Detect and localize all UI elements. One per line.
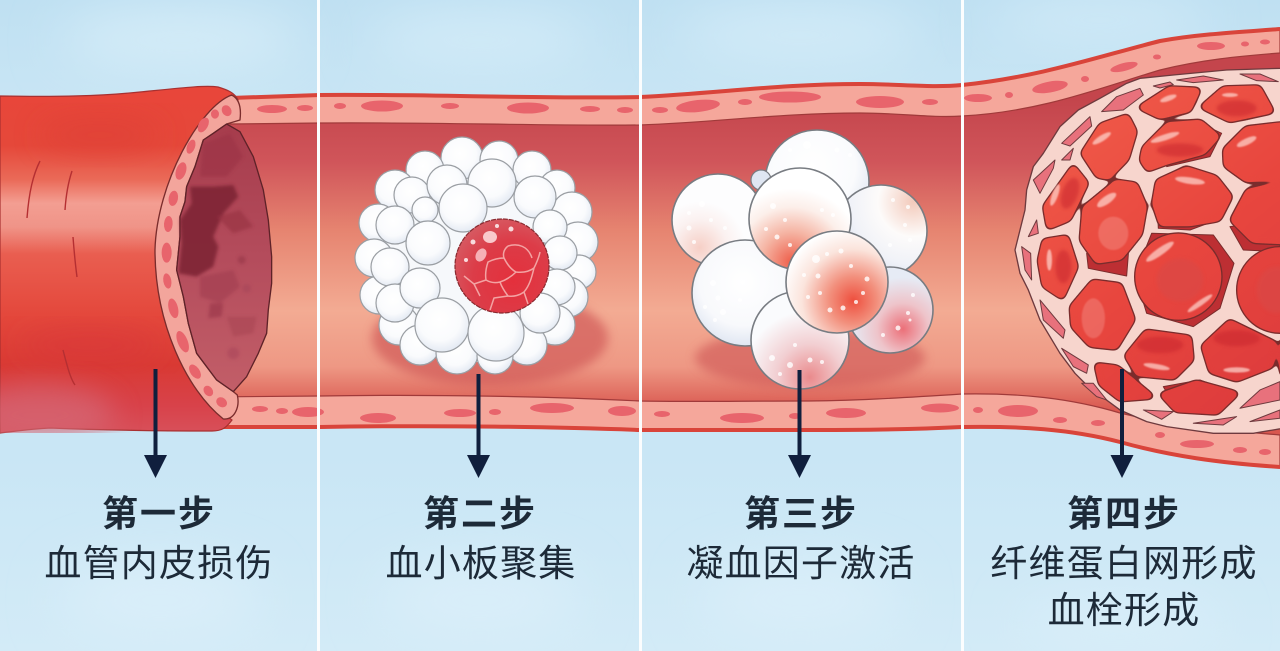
sphere top [765,130,869,234]
divider lines between panels [317,0,964,651]
vessel wall ring at cut [155,95,240,419]
panel 2: platelet aggregate [355,137,608,386]
step 2 caption: 第二步 [423,493,537,534]
platelet cluster outer layer [355,137,598,374]
sphere lower left [692,240,798,346]
step 1 caption: 血管内皮损伤 [44,543,274,584]
red blood cell core [455,219,549,313]
panel 3: activated clotting factor spheres [672,130,933,389]
red blood cell outlines [1041,88,1280,412]
vessel lower wall [200,394,1280,468]
panel 1: cut vessel tube [0,86,272,445]
sphere bottom [751,291,849,389]
sphere right [835,185,927,277]
step 2 caption [386,493,576,584]
step 2 caption: 血小板聚集 [386,543,576,584]
sphere centre top [749,168,851,270]
sphere shadow [695,328,925,388]
vessel upper wall [230,28,1280,125]
arrow step 2 [467,374,490,478]
step 1 caption [44,493,274,584]
ring cells [162,103,234,409]
sphere front activated [786,231,888,333]
platelet cluster inner layer [371,159,577,361]
aggregate shadow [372,290,608,386]
red blood cell fills [1041,88,1280,412]
step 4 caption: 血栓形成 [1048,590,1200,631]
step 3 caption [686,493,916,584]
step 1 caption: 第一步 [102,493,216,534]
fibrin net body [1015,67,1280,433]
vessel interior damaged [177,124,272,392]
step 4 caption [990,493,1258,631]
panel 4: fibrin net with trapped red cells [1015,67,1280,433]
step 4 caption: 纤维蛋白网形成 [990,543,1258,584]
arrow step 1 [144,369,167,478]
sphere left [672,174,764,266]
dark red pockets behind cells [1086,129,1280,390]
sphere lower right [847,267,933,353]
arrow step 4 [1110,369,1134,478]
tube shading [0,160,124,433]
large front red cell [1135,233,1222,320]
cell shading and highlights [1047,93,1260,373]
step 3 caption: 第三步 [744,493,858,534]
right edge red cell [1237,247,1280,333]
arrow step 3 [788,370,811,478]
blood vessel lumen [200,52,1280,435]
outer net pockets [1022,74,1280,425]
cluster white base [372,154,580,362]
step 3 caption: 凝血因子激活 [686,543,916,584]
step 4 caption: 第四步 [1067,493,1181,534]
vessel outer tube [0,86,238,433]
